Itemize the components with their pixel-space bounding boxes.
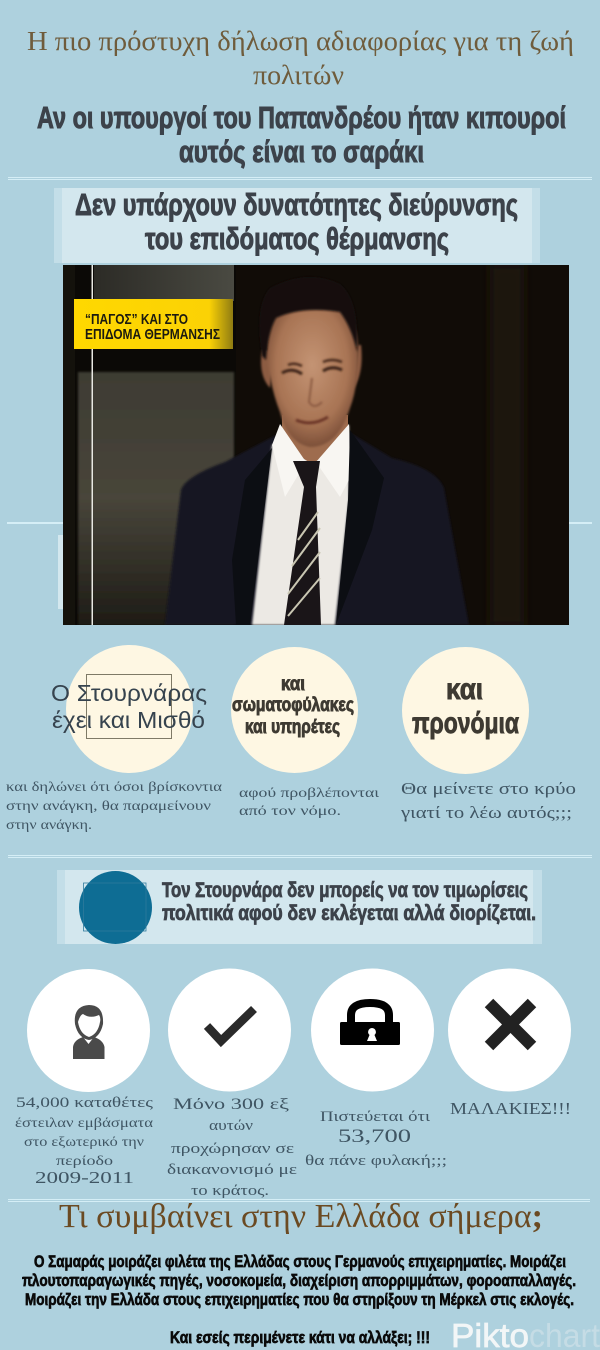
text: need statement: στην ανάγκη. [6, 818, 92, 833]
icon: cross in white circle [448, 968, 571, 1092]
text: shout: ΜΑΛΑΚΙΕΣ!!! [450, 1099, 571, 1118]
photo: minister portrait [63, 265, 569, 625]
circle: salary [51, 645, 207, 773]
subtitle [37, 100, 566, 169]
text: depositors: περίοδο [56, 1154, 113, 1169]
yellow caption: ΕΠΙΔΟΜΑ ΘΕΡΜΑΝΣΗΣ [85, 326, 220, 343]
icon: person in white circle [27, 969, 150, 1092]
ears [261, 345, 362, 388]
suit [165, 432, 469, 625]
text: jail: Πιστεύεται ότι [320, 1109, 430, 1125]
icon: blue circle [79, 871, 152, 944]
text: settlement: διακανονισμό με [167, 1162, 297, 1178]
collar [272, 424, 350, 497]
panel: heating allowance heading: του επιδόματος θέρμανσης [145, 221, 449, 256]
yellow caption: “ΠΑΓΟΣ” ΚΑΙ ΣΤΟ [85, 311, 188, 328]
text block: closing paragraph [22, 1252, 576, 1347]
hair [260, 296, 359, 360]
text: settlement: το κράτος. [191, 1183, 269, 1199]
text: stay in the cold: γιατί το λέω αυτός;;; [400, 803, 572, 822]
face [266, 298, 358, 447]
subtitle: αυτός είναι το σαράκι [179, 134, 424, 169]
text: jail: θα πάνε φυλακή;;; [305, 1153, 447, 1169]
text: settlement: προχώρησαν σε [171, 1141, 294, 1157]
lapels [232, 430, 384, 625]
shirt [252, 425, 349, 625]
text: depositors [15, 1095, 154, 1187]
tie [284, 461, 321, 625]
text: provided by law: από τον νόμο. [239, 804, 341, 819]
circle: salary: έχει και Μισθό [52, 707, 205, 733]
text: stay in the cold [400, 779, 576, 822]
circle: privileges: προνόμια [412, 707, 519, 740]
heading: Greece today: Τι συμβαίνει στην Ελλάδα σήμερα; [59, 1198, 543, 1235]
circle: privileges: και [446, 673, 483, 706]
text: settlement: Μόνο 300 εξ [173, 1096, 289, 1113]
text: depositors: 54,000 καταθέτες [16, 1095, 153, 1111]
text block: closing paragraph: Και εσείς περιμένετε κάτι να αλλάξει; !!! [170, 1328, 430, 1347]
text: depositors: στο εξωτερικό την [24, 1135, 144, 1150]
panel: heating allowance heading [54, 187, 540, 263]
circle: bodyguards: και υπηρέτες [245, 717, 340, 738]
text: need statement: στην ανάγκη, θα παραμείνουν [6, 799, 211, 814]
circle: bodyguards [231, 647, 358, 773]
panel: cannot be punished [57, 870, 542, 944]
text: jail [305, 1109, 447, 1169]
icon: check mark in white circle [168, 968, 291, 1092]
text: jail: 53,700 [338, 1126, 411, 1147]
text: settlement: αυτών [209, 1118, 253, 1134]
circle: salary: Ο Στουρνάρας [51, 680, 207, 706]
text: stay in the cold: Θα μείνετε στο κρύο [401, 779, 576, 798]
circle: privileges [402, 647, 529, 774]
text: provided by law [239, 786, 379, 819]
text: settlement [167, 1096, 297, 1199]
text: provided by law: αφού προβλέπονται [239, 786, 379, 801]
title [27, 26, 574, 90]
text: depositors: έστειλαν εμβάσματα [15, 1116, 154, 1131]
title: Η πιο πρόστυχη δήλωση αδιαφορίας για τη ζωή [27, 26, 574, 56]
logo: Piktochart [451, 1317, 600, 1350]
eyes, nose and mouth [282, 360, 342, 423]
text: need statement [6, 780, 223, 833]
title: πολιτών [253, 60, 344, 90]
panel: cannot be punished: πολιτικά αφού δεν εκλέγεται αλλά διορίζεται. [162, 902, 536, 925]
icon: padlock in white circle [311, 968, 434, 1092]
text: need statement: και δηλώνει ότι όσοι βρίσκοντια [6, 780, 223, 795]
circle: bodyguards: και [281, 674, 305, 695]
yellow caption [74, 299, 233, 349]
circle: bodyguards: σωματοφύλακες [232, 695, 354, 716]
neck [282, 415, 348, 464]
text: depositors: 2009-2011 [35, 1168, 134, 1187]
